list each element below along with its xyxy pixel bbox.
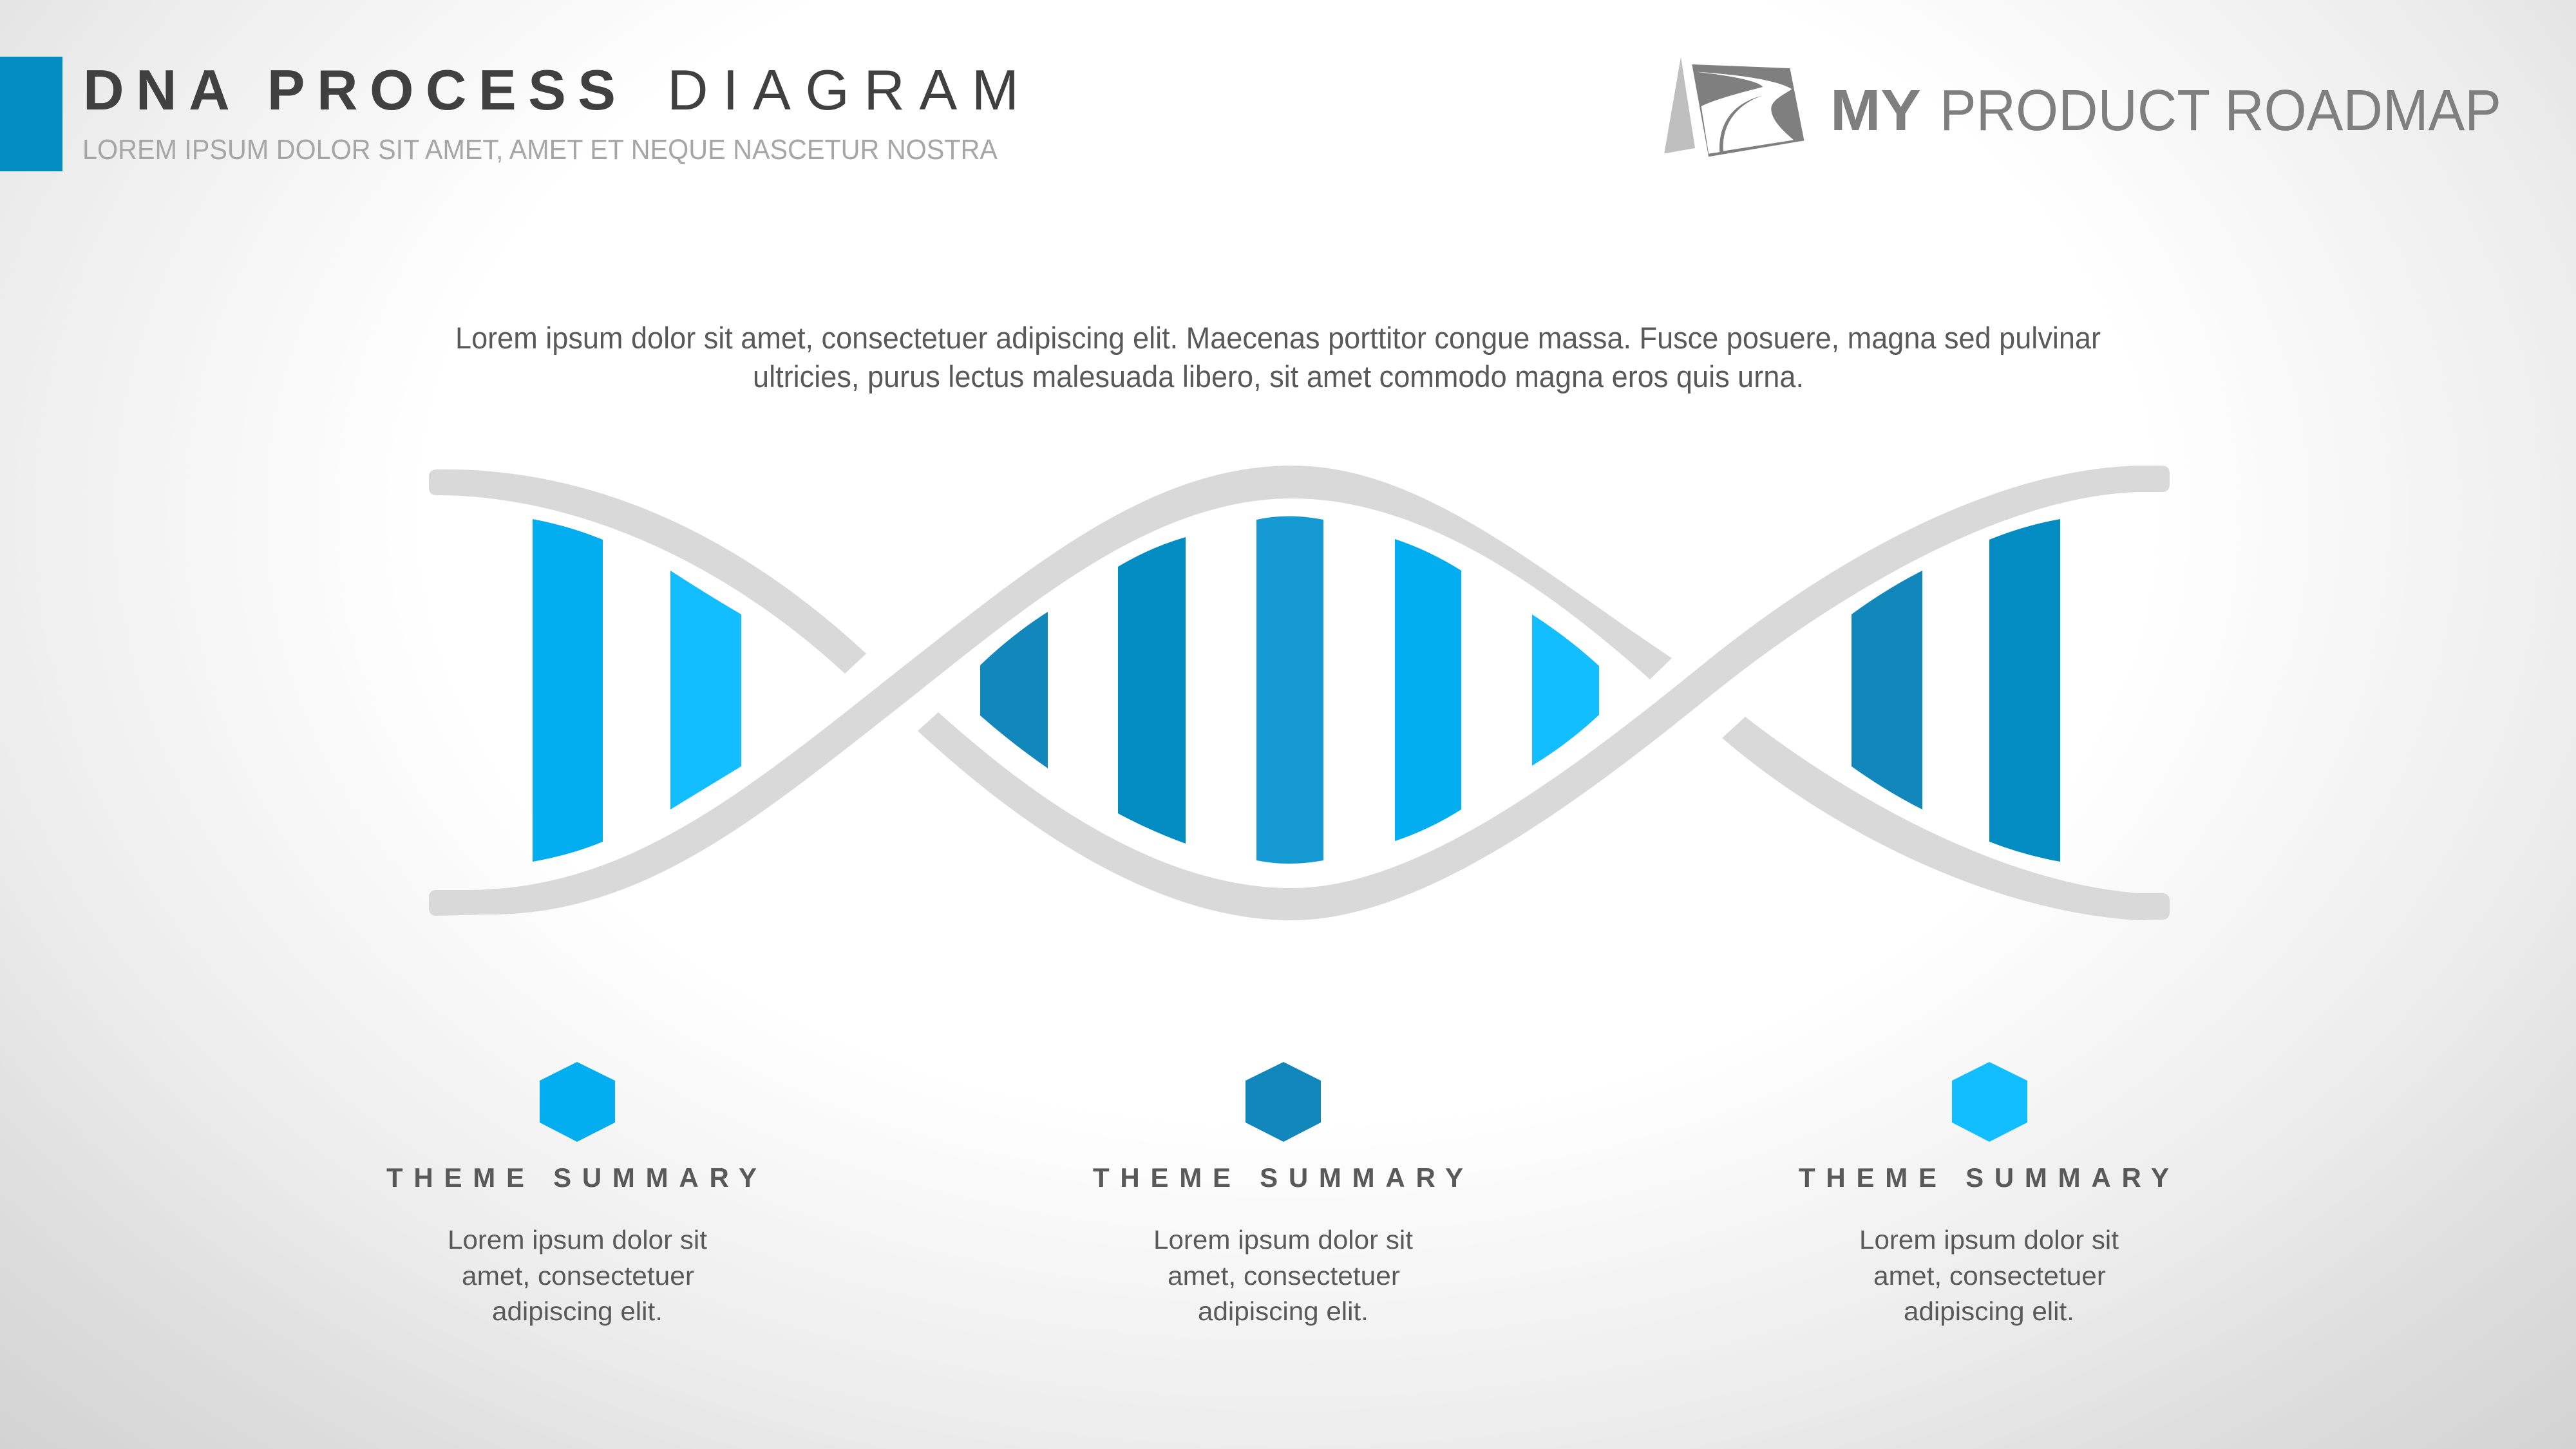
logo wordmark: PRODUCT ROADMAP bbox=[1940, 79, 2501, 143]
body text 3: adipiscing elit. bbox=[1904, 1296, 2074, 1326]
panel: theme summary 1 bbox=[386, 1062, 757, 1326]
header accent block bbox=[0, 57, 62, 171]
logo wordmark: MY bbox=[1830, 79, 1921, 143]
body text 2 bbox=[1153, 1225, 1414, 1326]
title: DIAGRAM bbox=[667, 58, 1019, 122]
intro text: ultricies, purus lectus malesuada libero, sit amet commodo magna eros quis urna. bbox=[753, 359, 1804, 393]
body text 1 bbox=[448, 1225, 708, 1326]
intro text bbox=[455, 321, 2101, 393]
body text 1: Lorem ipsum dolor sit bbox=[448, 1225, 708, 1255]
DNA helix diagram bbox=[429, 466, 2170, 920]
intro text: Lorem ipsum dolor sit amet, consectetuer adipiscing elit. Maecenas porttitor congue massa. Fusce posuere, magna sed pulvinar bbox=[455, 321, 2101, 355]
helix strands bbox=[429, 466, 2170, 920]
panel: theme summary 3 bbox=[1799, 1062, 2169, 1326]
icon: road logo bbox=[1664, 57, 1804, 156]
title: DNA PROCESS bbox=[83, 58, 616, 122]
logo bbox=[1664, 57, 2501, 156]
body text 1: amet, consectetuer bbox=[462, 1261, 694, 1291]
icon: hexagon 2 bbox=[1245, 1062, 1321, 1142]
heading 3: THEME SUMMARY bbox=[1799, 1162, 2169, 1193]
body text 1: adipiscing elit. bbox=[492, 1296, 663, 1326]
body text 3 bbox=[1859, 1225, 2119, 1326]
subtitle: LOREM IPSUM DOLOR SIT AMET, AMET ET NEQUE NASCETUR NOSTRA bbox=[82, 134, 998, 166]
base pair rungs bbox=[533, 516, 2060, 864]
heading 2: THEME SUMMARY bbox=[1093, 1162, 1463, 1193]
body text 3: amet, consectetuer bbox=[1873, 1261, 2106, 1291]
body text 3: Lorem ipsum dolor sit bbox=[1859, 1225, 2119, 1255]
title bbox=[83, 58, 1019, 122]
body text 2: Lorem ipsum dolor sit bbox=[1153, 1225, 1414, 1255]
body text 2: adipiscing elit. bbox=[1198, 1296, 1368, 1326]
panel: theme summary 2 bbox=[1093, 1062, 1463, 1326]
heading 1: THEME SUMMARY bbox=[386, 1162, 757, 1193]
icon: hexagon 3 bbox=[1952, 1062, 2027, 1142]
icon: hexagon 1 bbox=[540, 1062, 615, 1142]
body text 2: amet, consectetuer bbox=[1168, 1261, 1400, 1291]
